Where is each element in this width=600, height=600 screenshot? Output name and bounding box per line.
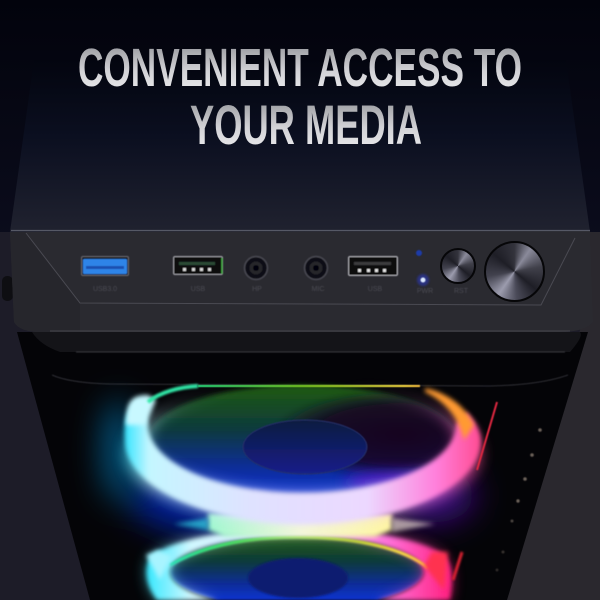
title <box>78 38 522 156</box>
case top surface <box>10 60 590 232</box>
title line 2: YOUR MEDIA <box>190 93 422 156</box>
fan 1 hub <box>243 420 367 474</box>
glass window <box>17 332 588 600</box>
LED: drive activity <box>416 250 422 256</box>
fan 1 ring <box>125 385 497 524</box>
port labels: PWR <box>417 288 433 295</box>
coloured ambient glow <box>104 400 475 540</box>
port labels: USB <box>368 286 383 293</box>
connector between fans <box>174 513 435 537</box>
power button <box>484 241 545 302</box>
port labels: USB <box>191 286 206 293</box>
side screw holes <box>496 428 542 572</box>
fan 1 and fan 2 lighting <box>104 385 542 600</box>
port: USB left <box>174 256 222 274</box>
right case side <box>505 232 600 600</box>
port: headphone jack <box>244 256 268 280</box>
left backdrop <box>0 232 92 600</box>
port: USB 3.0 <box>82 256 128 276</box>
port labels: MIC <box>312 286 324 293</box>
side knob <box>2 276 13 301</box>
background <box>0 0 600 240</box>
fan 1 disc <box>147 385 457 495</box>
port labels: USB3.0 <box>93 286 117 293</box>
port: USB right <box>348 256 398 276</box>
reset button <box>440 248 476 284</box>
port labels <box>93 286 469 295</box>
port labels: RST <box>454 288 469 295</box>
LED: power <box>417 274 429 286</box>
front panel <box>10 230 593 332</box>
port labels: HP <box>252 286 262 293</box>
fan 2 ring <box>146 528 462 600</box>
black front band <box>32 332 581 386</box>
port: microphone jack <box>304 256 328 280</box>
fan 2 disc <box>170 536 424 600</box>
